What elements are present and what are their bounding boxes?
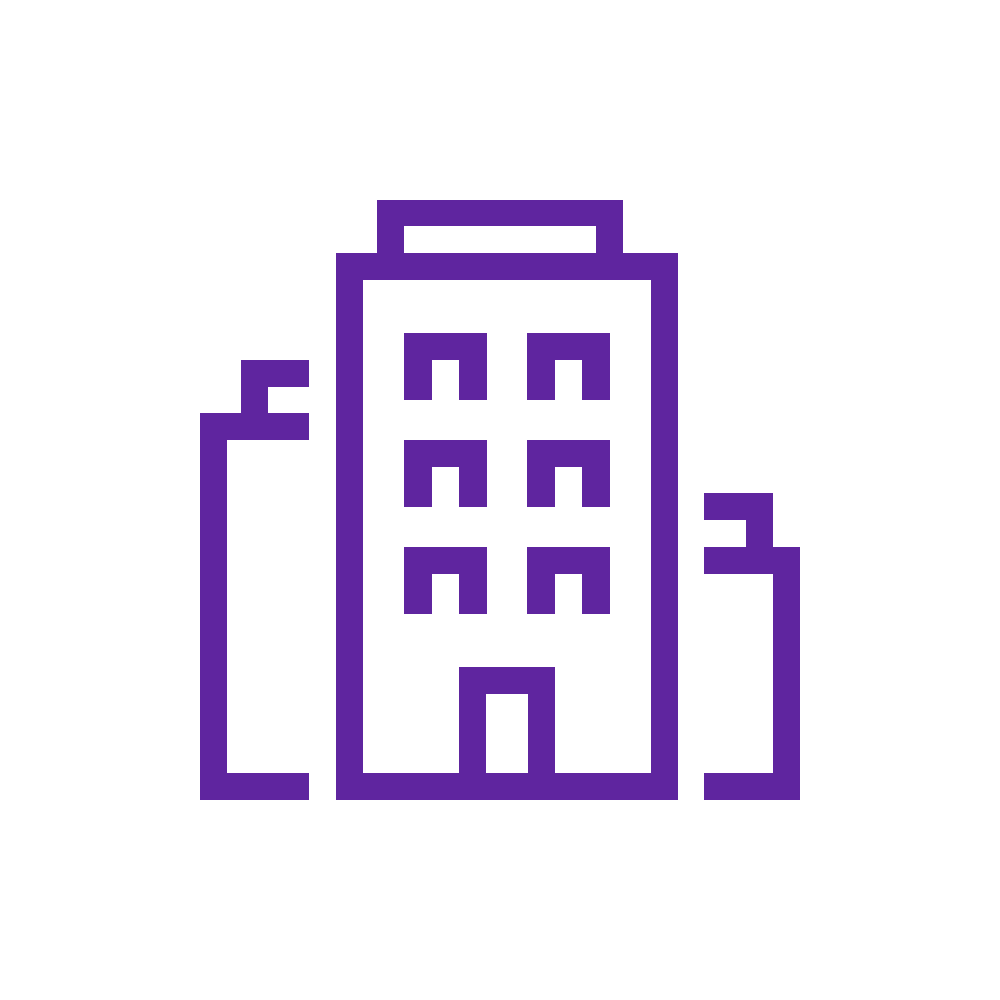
left building (200, 360, 309, 800)
window row 3 (404, 547, 610, 614)
window row 1 (404, 333, 610, 400)
roof block (377, 200, 623, 253)
window row 2 (404, 440, 610, 507)
right building (704, 493, 800, 800)
windows (404, 333, 610, 614)
central tower body (336, 253, 678, 800)
